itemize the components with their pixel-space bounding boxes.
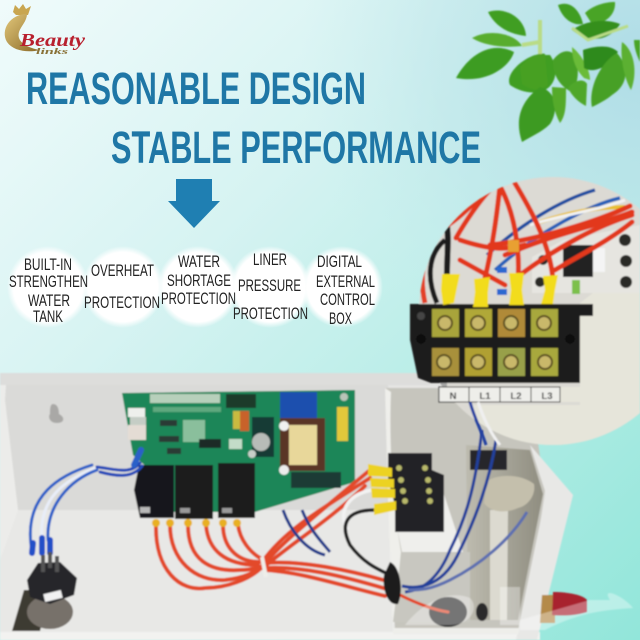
bracket lower plate [393,552,470,622]
photo: control box interior [0,373,633,640]
title line 2: STABLE PERFORMANCE [111,122,481,173]
logo: Beauty links: links [36,46,69,56]
label: built-in strengthen water tank: TANK [33,308,63,326]
back wall [0,385,395,510]
label: built-in strengthen water tank: BUILT-IN [24,256,72,274]
label: digital external control box: EXTERNAL [316,273,375,291]
right flange [516,445,573,640]
PCB [122,390,355,512]
label: water shortage protection: PROTECTION [161,290,236,308]
relays [134,463,255,519]
label: overheat protection [84,262,160,312]
yellow crimps [368,464,396,515]
logo: Beauty links [5,4,86,56]
cable tie [262,557,266,577]
right compartment wall [385,388,545,630]
blue and black cables [422,190,625,303]
icon: down arrow [168,179,220,228]
relay terminal crimps [152,519,241,527]
PCB chips [128,394,256,454]
capacitor [248,417,274,458]
lower right panel [470,293,640,445]
label: water shortage protection: SHORTAGE [167,272,231,290]
inset background [418,177,640,445]
label: overheat protection: PROTECTION [84,294,160,312]
terminal labels: L2 [510,391,522,402]
label: liner pressure protection: PROTECTION [233,305,308,323]
blue signal wires [30,450,142,553]
label: overheat protection: OVERHEAT [91,262,154,280]
metal bracket top [398,470,463,552]
inset photo: terminal block close-up [410,177,640,445]
label: built-in strengthen water tank: WATER [28,292,70,310]
label: built-in strengthen water tank [9,256,88,326]
terminal labels: N [450,391,457,402]
heating element [470,450,534,620]
label: water shortage protection: WATER [178,253,220,271]
box body [0,373,573,640]
label: digital external control box [316,253,375,328]
black and white wires [344,490,390,575]
bracket edge strip [385,388,401,630]
yellow crimp terminals [441,273,558,307]
watermark [405,587,633,630]
transformer [279,392,348,488]
wires below block [470,402,500,445]
circular inset content [418,177,640,445]
left wall [0,385,18,560]
small terminal block [388,453,444,532]
box top lip [0,373,430,385]
label: liner pressure protection: LINER [253,251,287,269]
label: water shortage protection [161,253,236,308]
navy wires lower [283,510,330,555]
inner shaded wall [466,445,543,620]
terminal labels: L1 [479,391,491,402]
dark holes [429,597,488,627]
pressure switch [12,552,77,631]
title line 1: REASONABLE DESIGN [26,63,366,114]
feature labels [9,251,375,328]
keyhole slot [49,404,63,423]
label: liner pressure protection: PRESSURE [238,277,301,295]
orange crimp behind wires [508,240,519,252]
terminal labels: L3 [541,391,553,402]
contactor [532,225,640,294]
label: digital external control box: CONTROL [320,291,375,309]
blue wires right [402,430,527,592]
leaves decoration [456,2,640,142]
relief valve [540,592,587,623]
label: built-in strengthen water tank: STRENGTHEN [9,273,88,291]
floor [0,510,395,632]
label: digital external control box: BOX [329,310,352,328]
label: liner pressure protection [233,251,308,323]
grommet [384,562,401,604]
feature bubbles [7,246,383,328]
red wires to relays [156,470,448,612]
bottom lip [0,632,540,640]
grey lip at left [440,382,448,388]
label: digital external control box: DIGITAL [317,253,362,271]
logo: Beauty links: Beauty [19,30,86,50]
red wires [448,180,632,285]
terminal block [410,304,593,383]
terminal labels [439,387,583,402]
